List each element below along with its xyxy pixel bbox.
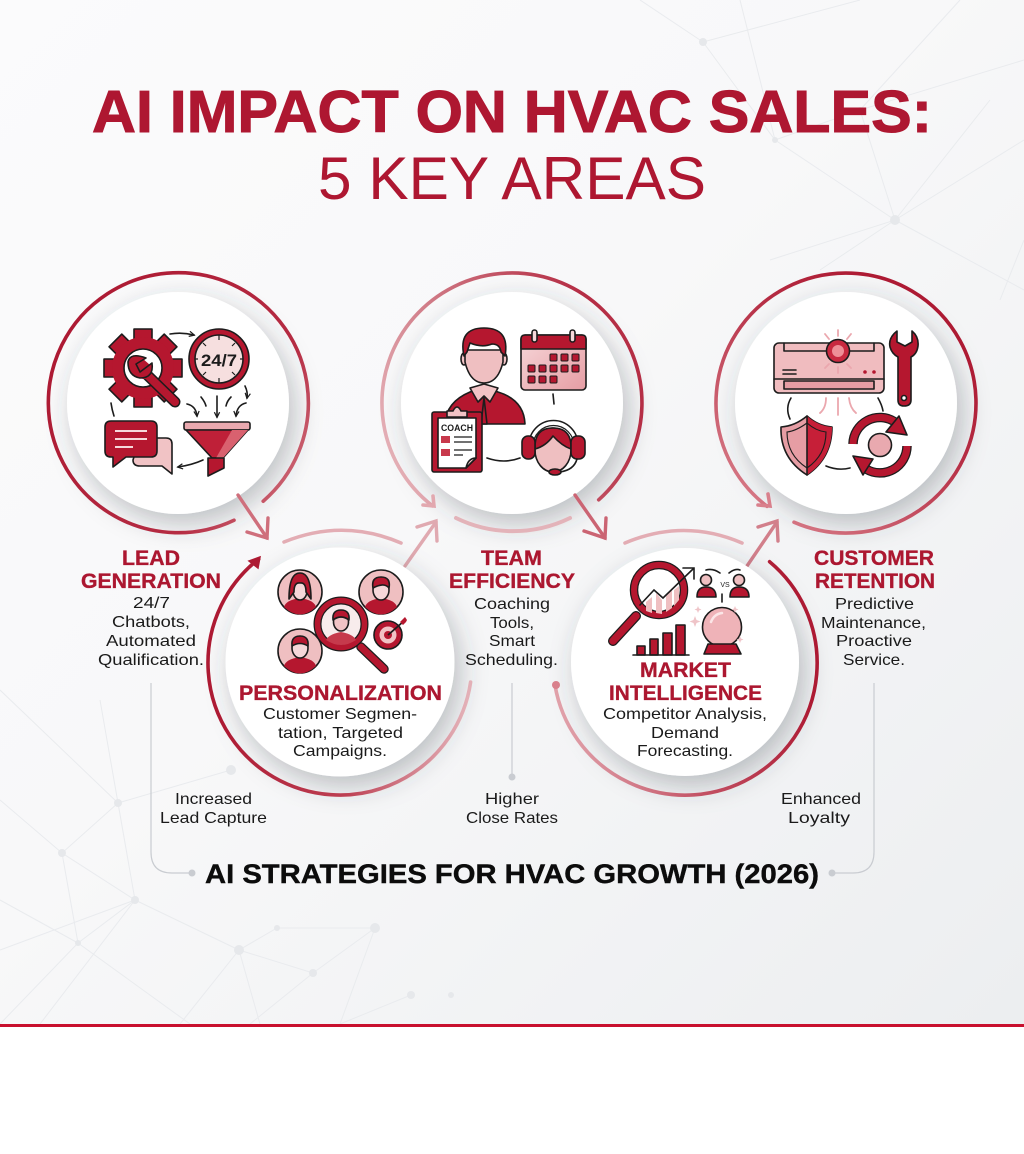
outcome: enhanced loyalty: Enhanced	[781, 791, 861, 808]
icon: magnifier with chart	[613, 565, 694, 641]
icon: crystal ball	[690, 606, 744, 654]
description: personalization	[263, 706, 417, 760]
circle: team efficiency	[382, 273, 642, 531]
icon: magnifier on customer	[318, 600, 384, 669]
icon: competitors versus	[697, 569, 749, 602]
icon: funnel	[184, 422, 250, 476]
outcome: increased lead capture	[160, 791, 267, 827]
outcome: higher close rates: Close Rates	[466, 810, 558, 827]
connector: lead generation to footer	[151, 683, 196, 876]
heading: customer retention: CUSTOMER	[814, 547, 934, 570]
description: team efficiency: Smart	[489, 633, 536, 650]
icon: calendar	[521, 330, 586, 390]
description: team efficiency	[465, 596, 558, 669]
description: customer retention: Maintenance,	[821, 615, 926, 632]
outcome: enhanced loyalty: Loyalty	[788, 810, 850, 827]
icon: flow arrows	[111, 333, 247, 467]
outcome: enhanced loyalty	[781, 791, 861, 827]
heading: team efficiency: TEAM	[481, 547, 542, 570]
icon: coach clipboard	[432, 407, 482, 472]
description: lead generation: 24/7	[133, 595, 170, 612]
heading: lead generation: GENERATION	[81, 570, 221, 593]
title	[92, 79, 932, 212]
circle: personalization	[208, 530, 471, 795]
description: customer retention: Predictive	[835, 596, 914, 613]
heading: lead generation	[81, 547, 221, 593]
heading: team efficiency	[449, 547, 575, 593]
icon: competitors versus: VS	[720, 582, 730, 589]
heading: customer retention: RETENTION	[815, 570, 935, 593]
description: lead generation: Automated	[106, 633, 196, 650]
heading: team efficiency: EFFICIENCY	[449, 570, 575, 593]
icon: coach person	[445, 328, 525, 424]
icon: gear and wrench	[104, 329, 182, 407]
circle: customer retention	[716, 273, 976, 533]
description: lead generation: Qualification.	[98, 652, 204, 669]
outcome: higher close rates	[466, 791, 558, 827]
outcome: increased lead capture: Lead Capture	[160, 810, 267, 827]
icon: maintenance cycle	[853, 416, 907, 475]
outcome: increased lead capture: Increased	[175, 791, 252, 808]
description: customer retention: Proactive	[836, 633, 912, 650]
heading: market intelligence: INTELLIGENCE	[609, 682, 762, 705]
icon: target and dart	[374, 617, 407, 649]
icon: bar chart	[633, 625, 689, 655]
description: team efficiency: Coaching	[474, 596, 550, 613]
description: market intelligence: Forecasting.	[637, 743, 733, 760]
icon: support headset agent	[487, 394, 585, 475]
icon: 24/7 clock	[189, 329, 249, 389]
icon: shield	[781, 416, 832, 475]
icon: 24/7 clock: 24/7	[201, 351, 237, 370]
arrow: lead generation to personalization	[238, 495, 268, 538]
description: personalization: Customer Segmen-	[263, 706, 417, 723]
description: lead generation	[98, 595, 204, 669]
circle: market intelligence	[552, 530, 817, 795]
icon: chat bubbles	[105, 421, 172, 474]
description: customer retention: Service.	[843, 652, 905, 669]
description: customer retention	[821, 596, 926, 669]
description: lead generation: Chatbots,	[112, 614, 190, 631]
title: AI IMPACT ON HVAC SALES:	[92, 79, 932, 145]
heading: customer retention	[814, 547, 935, 593]
footer heading: AI STRATEGIES FOR HVAC GROWTH (2026)	[205, 859, 819, 889]
bottom accent line	[0, 1024, 1024, 1027]
heading: lead generation: LEAD	[122, 547, 180, 570]
arrow: market intelligence to customer retention	[747, 521, 778, 566]
arrow: personalization to team efficiency	[405, 521, 437, 566]
icon: air conditioner	[774, 330, 884, 469]
title: 5 KEY AREAS	[318, 145, 706, 212]
description: market intelligence: Competitor Analysis,	[603, 706, 767, 723]
description: personalization: Campaigns.	[293, 743, 387, 760]
description: market intelligence	[603, 706, 767, 760]
outcome: higher close rates: Higher	[485, 791, 540, 808]
description: market intelligence: Demand	[651, 725, 719, 742]
connector: customer retention to footer	[828, 683, 874, 876]
heading: personalization: PERSONALIZATION	[239, 682, 442, 705]
description: personalization: tation, Targeted	[278, 725, 403, 742]
circle: lead generation	[48, 273, 308, 533]
heading: market intelligence: MARKET	[640, 659, 731, 682]
description: team efficiency: Scheduling.	[465, 652, 558, 669]
heading: market intelligence	[609, 659, 762, 705]
icon: coach clipboard: COACH	[441, 423, 473, 434]
icon: customer avatars	[278, 570, 403, 674]
description: team efficiency: Tools,	[490, 615, 534, 632]
icon: wrench	[890, 331, 918, 406]
connector: team efficiency	[508, 683, 516, 780]
arrow: team efficiency to market intelligence	[575, 495, 606, 538]
